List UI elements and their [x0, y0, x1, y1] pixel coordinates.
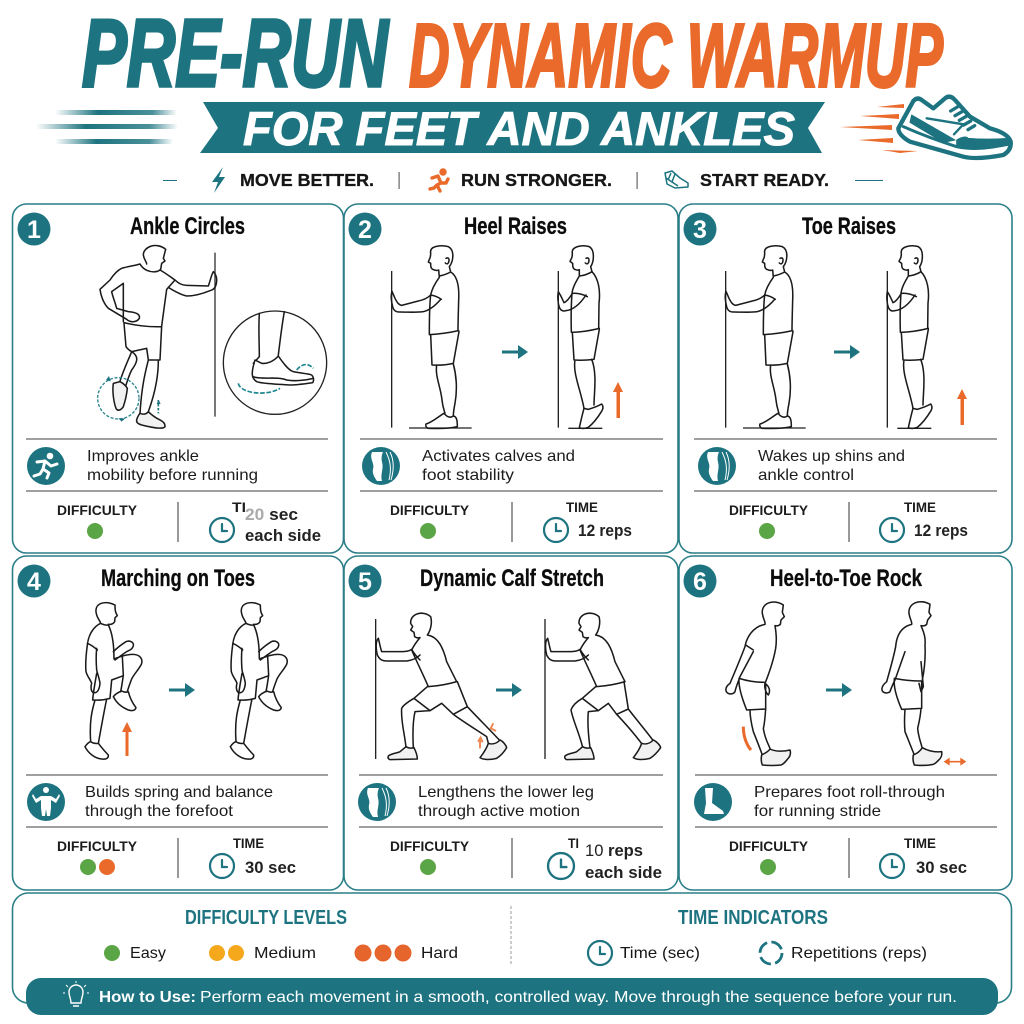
badge 1 — [18, 212, 50, 246]
speed lines left — [36, 110, 178, 144]
benefit text: Prepares foot roll-through — [754, 784, 945, 801]
time: TI — [232, 499, 246, 515]
benefit text: Improves ankle — [87, 448, 199, 465]
time — [880, 499, 968, 542]
time indicators legend: TIME INDICATORS — [678, 907, 828, 929]
time indicators legend — [588, 907, 927, 965]
difficulty — [729, 838, 809, 875]
benefit text — [758, 448, 905, 484]
time: each side — [245, 527, 321, 545]
arrow: next step — [826, 683, 852, 697]
time — [880, 835, 967, 878]
icon: lightning bolt — [212, 167, 225, 193]
time: 30 sec — [245, 859, 296, 877]
benefit text: Activates calves and — [422, 448, 575, 465]
icon: light bulb — [63, 981, 89, 1006]
time indicators legend: Repetitions (reps) — [791, 945, 927, 962]
heading: Toe Raises — [802, 213, 896, 240]
icon: lower leg — [698, 447, 736, 485]
time: TI — [568, 835, 579, 851]
time: TIME — [566, 499, 598, 515]
difficulty levels legend — [104, 907, 458, 962]
difficulty: DIFFICULTY — [57, 502, 138, 518]
difficulty — [390, 838, 470, 875]
time — [548, 835, 662, 882]
illustration: toe raises figures — [725, 246, 932, 428]
badge 6 — [684, 564, 716, 598]
illustration: calf stretch figures — [376, 613, 661, 760]
difficulty levels legend: Hard — [421, 945, 458, 962]
heading: Ankle Circles — [130, 213, 245, 240]
difficulty — [729, 502, 809, 539]
time: 30 sec — [916, 859, 967, 877]
illustration: heel-to-toe figures — [726, 602, 966, 766]
arrow: next step — [496, 683, 522, 697]
benefit text: Wakes up shins and — [758, 448, 905, 465]
title: pre-run dynamic warmup: PRE-RUN — [82, 0, 389, 107]
time: TIME — [233, 835, 264, 851]
how to use bar — [26, 978, 998, 1015]
arrow: lift — [122, 722, 132, 756]
time: 12 reps — [578, 522, 632, 540]
heading: Marching on Toes — [101, 565, 255, 592]
arrow: next step — [834, 345, 860, 359]
benefit text: ankle control — [758, 467, 854, 484]
difficulty: DIFFICULTY — [729, 502, 809, 518]
difficulty: DIFFICULTY — [729, 838, 809, 854]
difficulty levels legend: Medium — [254, 945, 316, 962]
icon: running shoe — [898, 97, 1011, 158]
time: 10 reps — [585, 842, 643, 860]
benefit text — [87, 448, 258, 484]
time: 20 sec — [245, 506, 298, 524]
difficulty: DIFFICULTY — [390, 838, 470, 854]
benefit text — [754, 784, 945, 820]
benefit text — [85, 784, 273, 820]
illustration: marching figures — [85, 603, 287, 759]
heading: Heel-to-Toe Rock — [770, 565, 923, 592]
time indicators legend: Time (sec) — [620, 945, 700, 962]
badge 4 — [18, 564, 50, 598]
time: TIME — [904, 835, 936, 851]
illustration: ankle circles figure at wall — [98, 246, 327, 428]
arrow: next step — [169, 683, 195, 697]
tagline row: RUN STRONGER. — [461, 170, 612, 190]
time: each side — [585, 864, 662, 882]
benefit text: foot stability — [422, 467, 514, 484]
icon: runner — [27, 447, 65, 485]
legend panel — [12, 893, 1012, 1003]
badge 5: 5 — [358, 568, 372, 596]
difficulty: DIFFICULTY — [57, 838, 138, 854]
badge 6: 6 — [693, 568, 707, 596]
panel 2: heel raises — [344, 204, 678, 553]
icon: calf muscle — [362, 447, 400, 485]
badge 4: 4 — [27, 568, 41, 596]
tagline row — [163, 167, 883, 193]
icon: calf muscle — [358, 783, 396, 821]
heading: Heel Raises — [464, 213, 567, 240]
tagline row: MOVE BETTER. — [240, 170, 374, 190]
time: 12 reps — [914, 522, 968, 540]
time — [210, 835, 296, 878]
how to use bar: How to Use: — [99, 989, 196, 1006]
subtitle banner: FOR FEET AND ANKLES — [243, 102, 795, 155]
panel 4: marching on toes — [12, 556, 344, 890]
panel 3: toe raises — [679, 204, 1012, 553]
icon: orange runner — [430, 170, 448, 191]
time: TIME — [904, 499, 936, 515]
difficulty — [390, 502, 470, 539]
benefit text: Builds spring and balance — [85, 784, 273, 801]
panel 5: dynamic calf stretch — [344, 556, 678, 890]
icon: standing body — [27, 783, 65, 821]
badge 3: 3 — [693, 216, 707, 244]
title: pre-run dynamic warmup — [82, 0, 944, 107]
time — [544, 499, 632, 542]
benefit text: Lengthens the lower leg — [418, 784, 594, 801]
benefit text — [422, 448, 575, 484]
benefit text: mobility before running — [87, 467, 258, 484]
benefit text: through active motion — [418, 803, 580, 820]
benefit text: through the forefoot — [85, 803, 234, 820]
badge 1: 1 — [27, 216, 41, 244]
benefit text: for running stride — [754, 803, 881, 820]
arrow: next step — [502, 345, 528, 359]
tagline row: START READY. — [700, 170, 829, 190]
badge 5 — [348, 564, 382, 598]
illustration: heel raises figures — [391, 246, 603, 428]
difficulty — [57, 838, 138, 875]
difficulty levels legend: Easy — [130, 945, 166, 962]
icon: small shoe — [665, 171, 688, 188]
arrow: raise — [613, 382, 623, 418]
time — [210, 499, 321, 545]
difficulty — [57, 502, 138, 539]
badge 2 — [348, 212, 382, 246]
heading: Dynamic Calf Stretch — [420, 565, 604, 592]
arrow: raise — [957, 389, 967, 425]
icon: foot — [694, 783, 732, 821]
difficulty: DIFFICULTY — [390, 502, 470, 518]
panel 6: heel-to-toe rock — [679, 556, 1012, 890]
panel 1: ankle circles — [12, 204, 344, 553]
badge 3 — [684, 212, 716, 246]
difficulty levels legend: DIFFICULTY LEVELS — [185, 907, 347, 929]
badge 2: 2 — [358, 216, 372, 244]
how to use bar: Perform each movement in a smooth, controlled way. Move through the sequence before your run. — [200, 989, 957, 1006]
speed lines right — [840, 104, 918, 153]
benefit text — [418, 784, 594, 820]
